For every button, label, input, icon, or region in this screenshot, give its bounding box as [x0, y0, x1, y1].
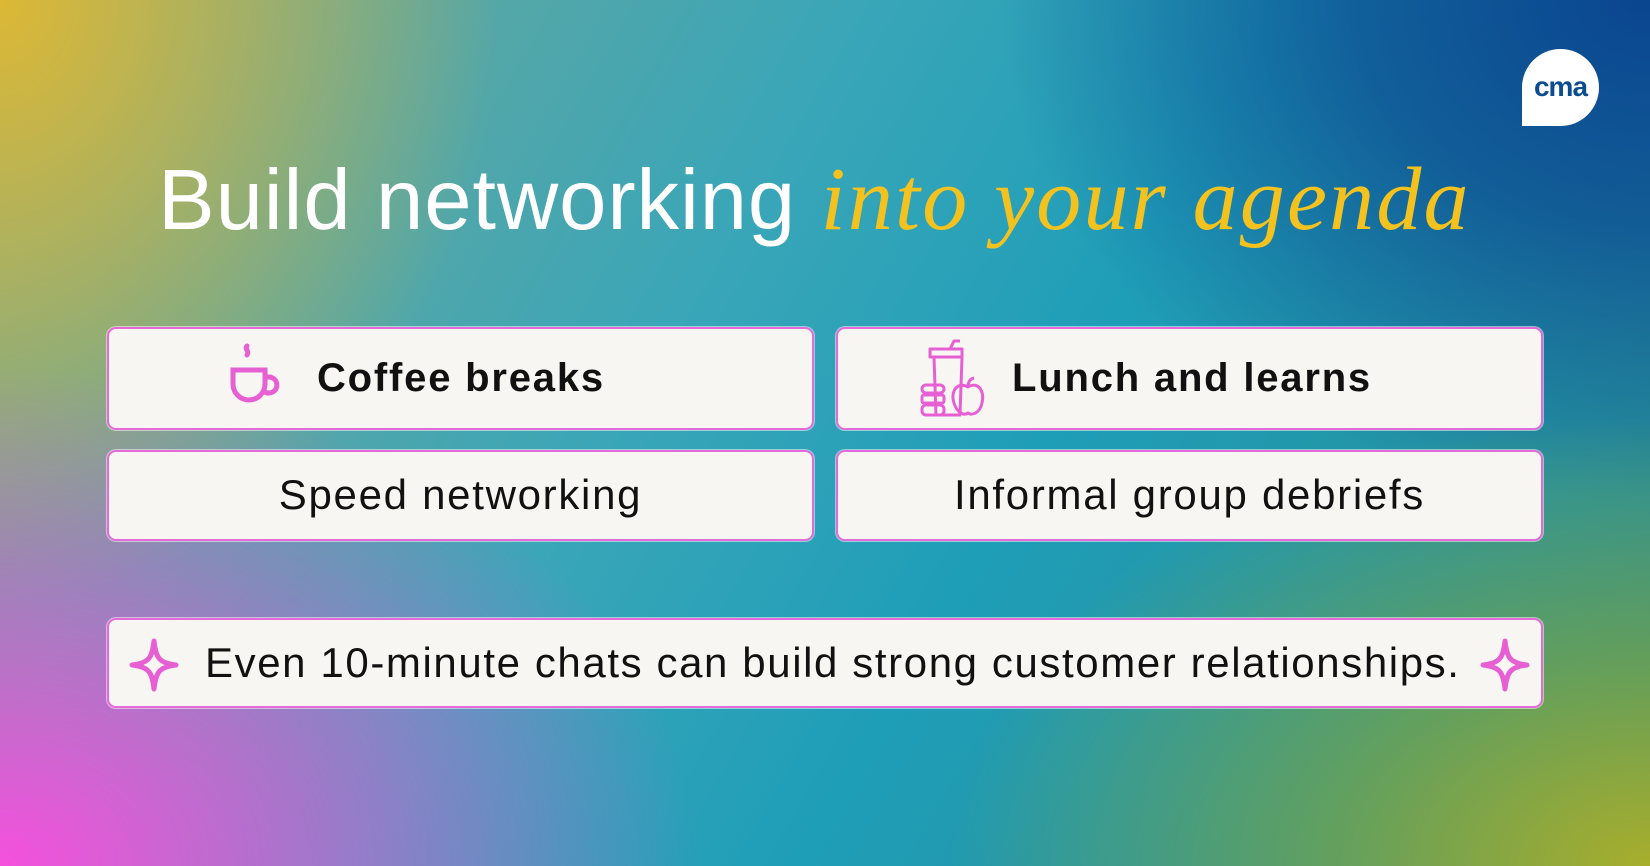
panel: speed networking: Speed networking [279, 471, 642, 518]
panel: coffee breaks [107, 327, 814, 430]
text: coffee breaks: Coffee breaks [317, 356, 605, 400]
icon: sparkle right [1480, 638, 1530, 692]
text: lunch and learns: Lunch and learns [1012, 356, 1372, 400]
logo [1522, 49, 1599, 126]
logo: cma [1534, 71, 1587, 102]
panel: informal group debriefs [836, 450, 1543, 541]
title: Build networking into your agenda [158, 150, 1471, 249]
text: callout: Even 10-minute chats can build strong customer relationships. [205, 639, 1461, 686]
icon: lunch [920, 340, 984, 416]
panel: informal group debriefs: Informal group debriefs [954, 471, 1425, 518]
panel: speed networking [107, 450, 814, 541]
panel: lunch and learns [836, 327, 1543, 430]
icon: coffee cup [230, 344, 280, 402]
icon: sparkle left [130, 638, 178, 692]
callout: bottom banner [107, 618, 1543, 708]
